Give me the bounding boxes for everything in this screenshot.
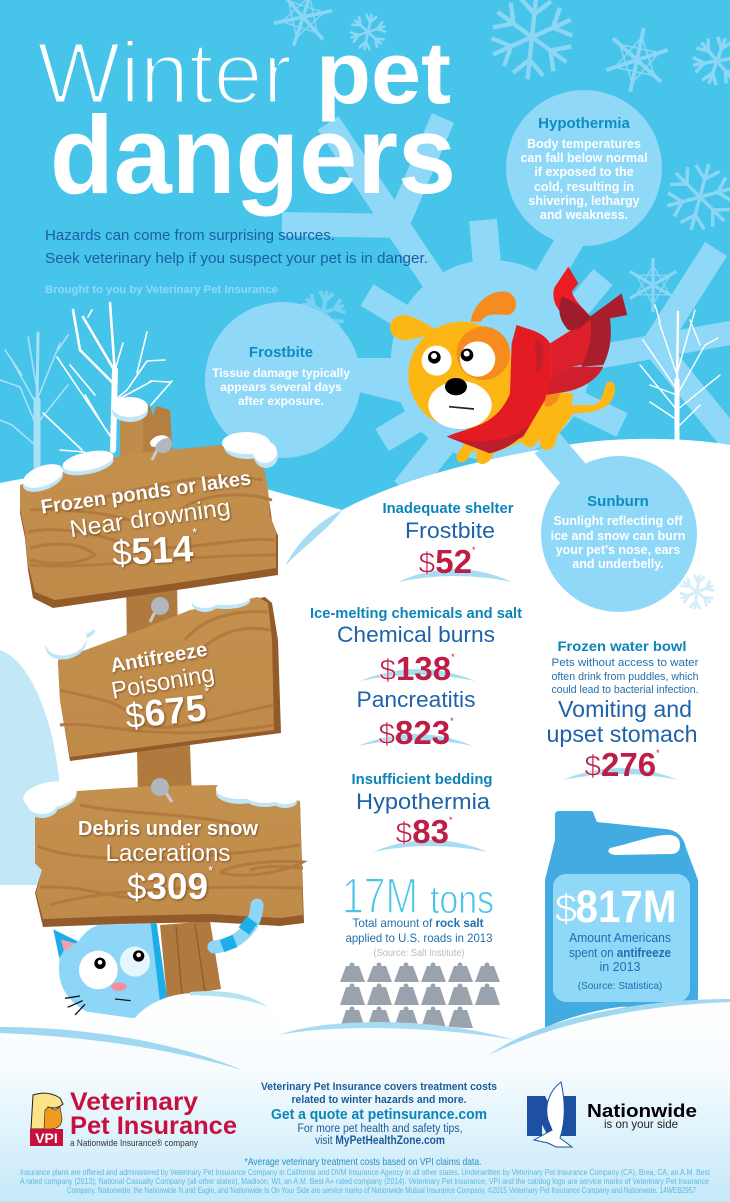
nail <box>150 435 172 460</box>
stat: frozen water bowl: often drink from puddles, which <box>552 671 698 683</box>
footer message: Get a quote at petinsurance.com <box>271 1107 487 1123</box>
sign: debris under snow <box>21 778 304 927</box>
dog tail and body <box>457 381 615 464</box>
stat: frozen water bowl <box>546 638 699 783</box>
jug text <box>555 881 676 992</box>
callout: frostbite <box>205 302 361 458</box>
stat: frozen water bowl: could lead to bacterial infection. <box>552 684 698 696</box>
sign: frozen ponds <box>20 397 278 608</box>
pale snowflake <box>677 572 717 612</box>
stat: frozen water bowl: $276 <box>584 746 656 783</box>
stat: rock salt tonnage: tons <box>430 878 494 922</box>
footer message: Veterinary Pet Insurance covers treatment costs <box>261 1081 497 1093</box>
title <box>37 23 456 217</box>
sky background <box>0 0 730 620</box>
foreground snow and footer background <box>0 991 730 1202</box>
snow caps <box>21 778 297 818</box>
white tree left <box>43 303 172 452</box>
weight icons <box>340 962 500 1028</box>
stat: ice-melting chemicals: * <box>450 716 454 726</box>
footer message <box>261 1081 497 1147</box>
stat: frostbite cost: Frostbite <box>405 518 495 543</box>
callout: hypothermia: and weakness. <box>540 208 628 222</box>
cat tail <box>214 905 257 947</box>
stat: ice-melting chemicals: $823 <box>378 714 450 751</box>
sign text: $309 <box>127 866 208 907</box>
stat: rock salt tonnage: 17M <box>342 868 418 924</box>
nail <box>151 778 172 802</box>
sign text: Lacerations <box>106 840 230 867</box>
dog ears <box>390 315 437 340</box>
dog head <box>408 322 515 428</box>
stat: frozen water bowl: Vomiting and <box>558 696 692 722</box>
callout: frostbite: appears several days <box>220 380 342 394</box>
signpost <box>120 404 221 998</box>
snow caps <box>20 397 278 497</box>
stat: rock salt tonnage <box>342 868 494 959</box>
post segments <box>120 404 173 470</box>
snow hills <box>0 439 730 1040</box>
stat: frozen water bowl: Pets without access to water <box>552 657 699 669</box>
footer message: related to winter hazards and more. <box>292 1094 466 1106</box>
callout: hypothermia: Body temperatures <box>527 137 641 151</box>
callout: sunburn: and underbelly. <box>572 557 664 571</box>
stat: rock salt tonnage: Total amount of rock salt <box>352 916 484 930</box>
legal text <box>20 1167 711 1195</box>
jug text: Amount Americans <box>569 931 671 945</box>
stat: ice-melting chemicals: Pancreatitis <box>356 687 476 712</box>
sign text: * <box>208 863 213 878</box>
stat: insufficient bedding: * <box>449 815 453 825</box>
callout: hypothermia: shivering, lethargy <box>528 194 640 208</box>
cat <box>53 923 167 1018</box>
stat: insufficient bedding: Hypothermia <box>356 789 491 814</box>
white tree right <box>640 305 720 440</box>
dog nose and mouth <box>445 378 474 409</box>
callout: frostbite: Frostbite <box>249 344 313 361</box>
trees <box>0 303 720 470</box>
Nationwide logo: is on your side <box>604 1117 678 1131</box>
callout: sunburn: ice and snow can burn <box>551 529 685 543</box>
nail <box>150 597 169 622</box>
sign text: Poisoning <box>109 660 216 705</box>
pale tree <box>0 333 68 470</box>
VPI logo: Veterinary <box>70 1088 198 1116</box>
eye patch <box>457 327 510 380</box>
callout: hypothermia <box>506 90 662 246</box>
callout: hypothermia: cold, resulting in <box>534 180 634 194</box>
stat: frozen water bowl: Frozen water bowl <box>558 638 686 654</box>
antifreeze jug <box>545 811 698 1040</box>
subtitle: Hazards can come from surprising sources. <box>45 228 335 244</box>
stat: ice-melting chemicals: Ice-melting chemicals and salt <box>310 606 522 622</box>
N and eagle mark <box>527 1082 576 1147</box>
scarf <box>447 267 627 453</box>
large background snowflake <box>282 118 730 490</box>
Nationwide logo <box>527 1082 697 1147</box>
sign text <box>109 639 216 736</box>
cost footnote: *Average veterinary treatment costs based on VPI claims data. <box>244 1156 482 1168</box>
sign: antifreeze <box>42 591 281 761</box>
title: dangers <box>50 94 456 217</box>
stat: ice-melting chemicals: $138 <box>379 650 451 687</box>
jug text: 817M <box>576 881 676 932</box>
sign text: Frozen ponds or lakes <box>40 467 252 519</box>
title: pet <box>316 23 451 122</box>
stat: ice-melting chemicals <box>310 606 522 751</box>
logo mark <box>30 1093 63 1146</box>
footer message: visit MyPetHealthZone.com <box>315 1135 445 1147</box>
sign text: Near drowning <box>68 494 232 543</box>
jug text: in 2013 <box>599 960 641 974</box>
stat: frozen water bowl: * <box>656 748 660 758</box>
stat: ice-melting chemicals: * <box>451 652 455 662</box>
VPI logo: Pet Insurance <box>70 1112 237 1140</box>
callout: hypothermia: Hypothermia <box>538 115 630 132</box>
callout: frostbite: Tissue damage typically <box>212 366 350 380</box>
footer message: For more pet health and safety tips, <box>298 1123 462 1135</box>
sign text <box>40 467 252 573</box>
sign text: * <box>192 525 198 540</box>
stat: frostbite cost: * <box>472 545 476 555</box>
callout: hypothermia: if exposed to the <box>534 165 634 179</box>
jug text: $ <box>555 887 577 931</box>
dog eyes <box>422 341 495 377</box>
VPI logo <box>30 1088 237 1149</box>
stat: insufficient bedding: $83 <box>396 813 449 850</box>
sign text: * <box>204 684 210 699</box>
callout: frostbite: after exposure. <box>238 394 324 408</box>
jug text: spent on antifreeze <box>569 946 671 960</box>
stat: rock salt tonnage: (Source: Salt Institute) <box>374 948 464 959</box>
small snowflakes <box>269 0 730 339</box>
stat: frostbite cost: $52 <box>419 543 472 580</box>
stat: insufficient bedding: Insufficient bedding <box>352 772 492 788</box>
credit line: Brought to you by Veterinary Pet Insurance <box>45 284 278 296</box>
stat: ice-melting chemicals: Chemical burns <box>337 622 495 647</box>
sign text: Antifreeze <box>109 639 209 677</box>
sign text: $514 <box>111 528 194 573</box>
callout: hypothermia: can fall below normal <box>520 151 648 165</box>
jug text: (Source: Statistica) <box>578 981 662 992</box>
arm linking snowflake to sunburn callout <box>547 443 582 484</box>
snow caps <box>42 591 250 664</box>
sign text: $675 <box>123 687 208 736</box>
subtitle: Seek veterinary help if you suspect your pet is in danger. <box>45 251 428 267</box>
orange body patch <box>543 393 560 407</box>
jug label <box>553 874 690 1002</box>
stat: frostbite cost <box>382 501 514 582</box>
callout: sunburn: your pet's nose, ears <box>556 543 680 557</box>
dog with red scarf <box>390 267 627 464</box>
stat: insufficient bedding <box>352 772 492 852</box>
muzzle <box>428 381 492 429</box>
sign text: Debris under snow <box>78 818 258 840</box>
callout: sunburn: Sunburn <box>587 493 649 510</box>
logo mark: VPI <box>35 1130 58 1146</box>
subtitle <box>45 228 428 267</box>
stat: frostbite cost: Inadequate shelter <box>382 501 514 517</box>
callout: sunburn: Sunlight reflecting off <box>553 514 683 528</box>
jug body <box>545 811 698 1040</box>
stat: rock salt tonnage: applied to U.S. roads in 2013 <box>346 931 493 945</box>
stat: frozen water bowl: upset stomach <box>546 721 698 747</box>
sign text <box>78 818 258 907</box>
callout: sunburn <box>541 456 697 612</box>
title: Winter <box>37 25 292 122</box>
VPI logo: a Nationwide Insurance® company <box>70 1138 198 1149</box>
Nationwide logo: Nationwide <box>587 1101 697 1121</box>
